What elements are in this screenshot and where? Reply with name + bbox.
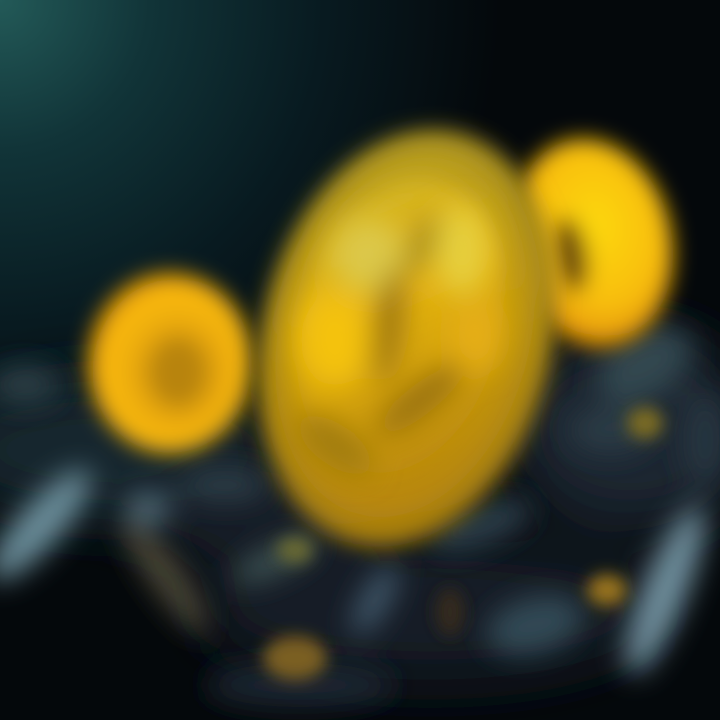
coin face: relief highlights xyxy=(287,206,501,487)
coin: large centre xyxy=(215,97,599,579)
icon: dark notch in right coin xyxy=(547,215,593,295)
coin: back right xyxy=(492,124,692,362)
coin: left xyxy=(88,273,252,453)
rubble: dark slate pile xyxy=(0,311,720,707)
